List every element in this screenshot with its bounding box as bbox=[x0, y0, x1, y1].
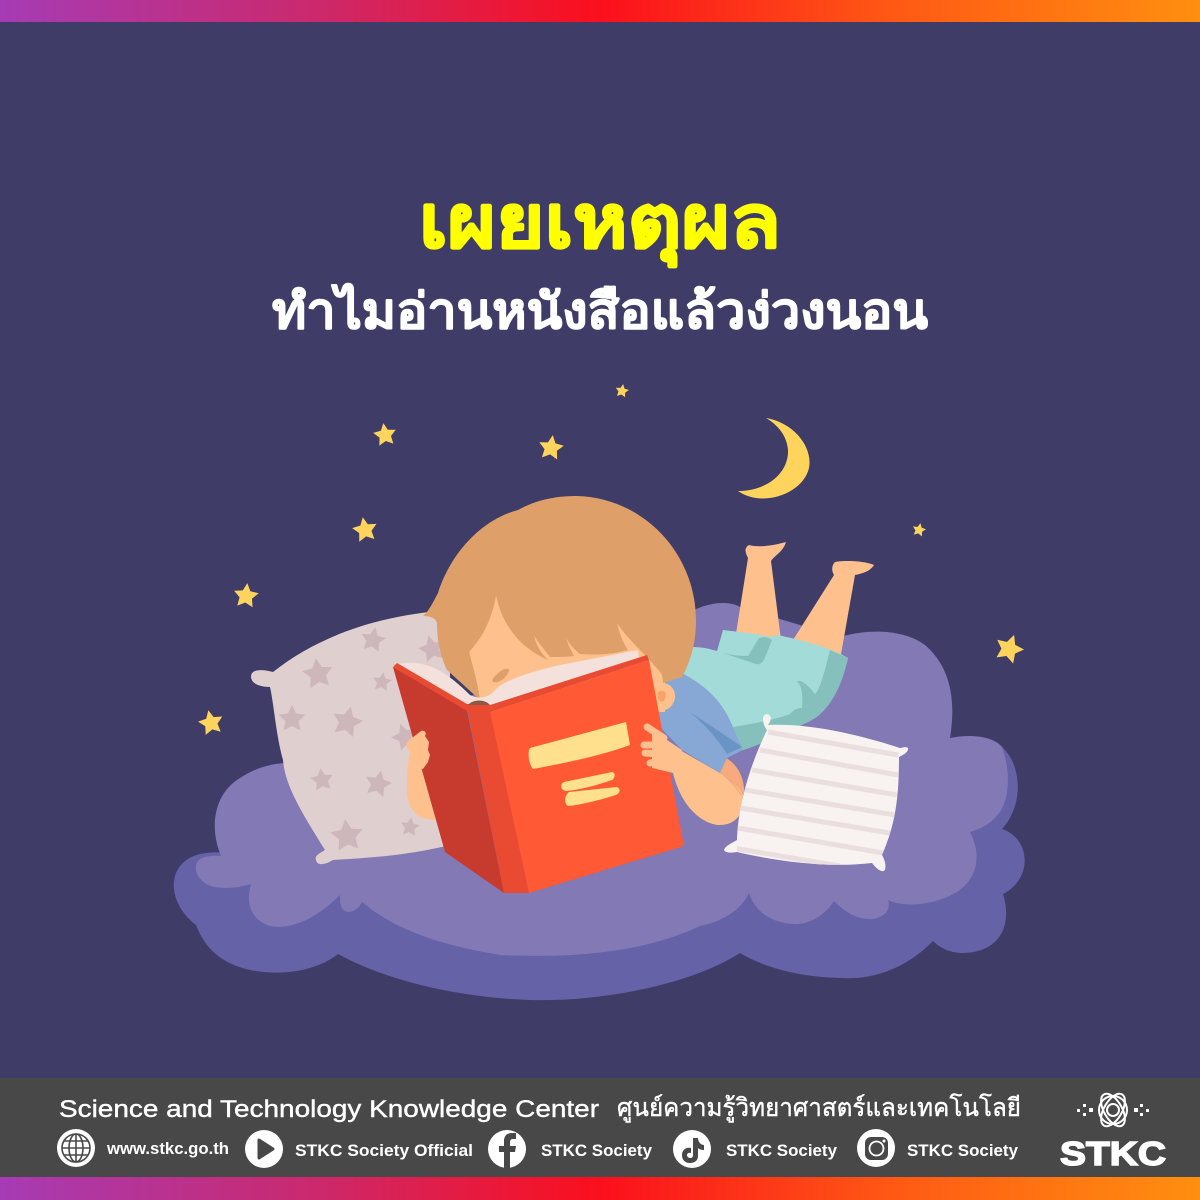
logo emblem bbox=[1096, 1090, 1130, 1130]
far arm shading bbox=[720, 757, 744, 795]
bottom gradient bar bbox=[0, 1177, 1200, 1200]
shorts shadow bbox=[717, 637, 848, 750]
left pillow bbox=[251, 610, 450, 864]
pillow stripes bbox=[727, 732, 898, 866]
website text: www.stkc.go.th bbox=[106, 1140, 229, 1158]
shorts bbox=[670, 630, 848, 750]
near arm bbox=[407, 765, 440, 820]
top gradient bar bbox=[0, 0, 1200, 22]
logo: STKC bbox=[1060, 1090, 1166, 1172]
hands bbox=[406, 727, 682, 773]
tiktok text: STKC Society bbox=[726, 1141, 838, 1160]
book back cover bbox=[393, 667, 504, 893]
title: เผยเหตุผล bbox=[419, 180, 781, 268]
eye bbox=[492, 669, 509, 682]
icon: play bbox=[245, 1130, 283, 1168]
icon: crescent moon bbox=[738, 418, 810, 498]
icon: tiktok bbox=[673, 1130, 711, 1168]
light cloud bbox=[196, 603, 1008, 956]
book edge bbox=[393, 655, 649, 712]
legs bbox=[735, 542, 786, 640]
footer heading thai: ศูนย์ความรู้วิทยาศาสตร์และเทคโนโลยี bbox=[617, 1093, 1021, 1123]
subtitle: ทำไมอ่านหนังสือแล้วง่วงนอน bbox=[272, 282, 929, 339]
book spine bbox=[467, 707, 529, 893]
book front cover bbox=[490, 660, 684, 893]
book text lines bbox=[561, 772, 615, 791]
title plate bbox=[529, 722, 630, 769]
far arm bbox=[673, 750, 744, 825]
youtube text: STKC Society Official bbox=[295, 1141, 473, 1160]
page spine bbox=[468, 700, 490, 705]
illustration: child reading on a cloud bbox=[174, 496, 1025, 1000]
logo dots bbox=[1077, 1104, 1149, 1116]
book bbox=[393, 650, 684, 893]
instagram text: STKC Society bbox=[907, 1141, 1019, 1160]
hair bbox=[423, 496, 696, 700]
dark cloud base bbox=[174, 747, 1025, 1000]
facebook text: STKC Society bbox=[541, 1141, 653, 1160]
shirt bbox=[655, 672, 743, 773]
footer heading english: Science and Technology Knowledge Center bbox=[59, 1096, 599, 1123]
icon: globe bbox=[57, 1129, 95, 1167]
icon: instagram bbox=[857, 1129, 895, 1167]
footer panel bbox=[0, 1078, 1200, 1177]
book pages bbox=[397, 650, 640, 712]
stars in the sky bbox=[196, 383, 1028, 736]
logo wordmark: STKC bbox=[1060, 1135, 1166, 1172]
icon: facebook bbox=[488, 1130, 526, 1168]
right pillow bbox=[724, 714, 908, 871]
head: face and ear bbox=[469, 590, 665, 712]
pillow stars bbox=[279, 625, 448, 851]
